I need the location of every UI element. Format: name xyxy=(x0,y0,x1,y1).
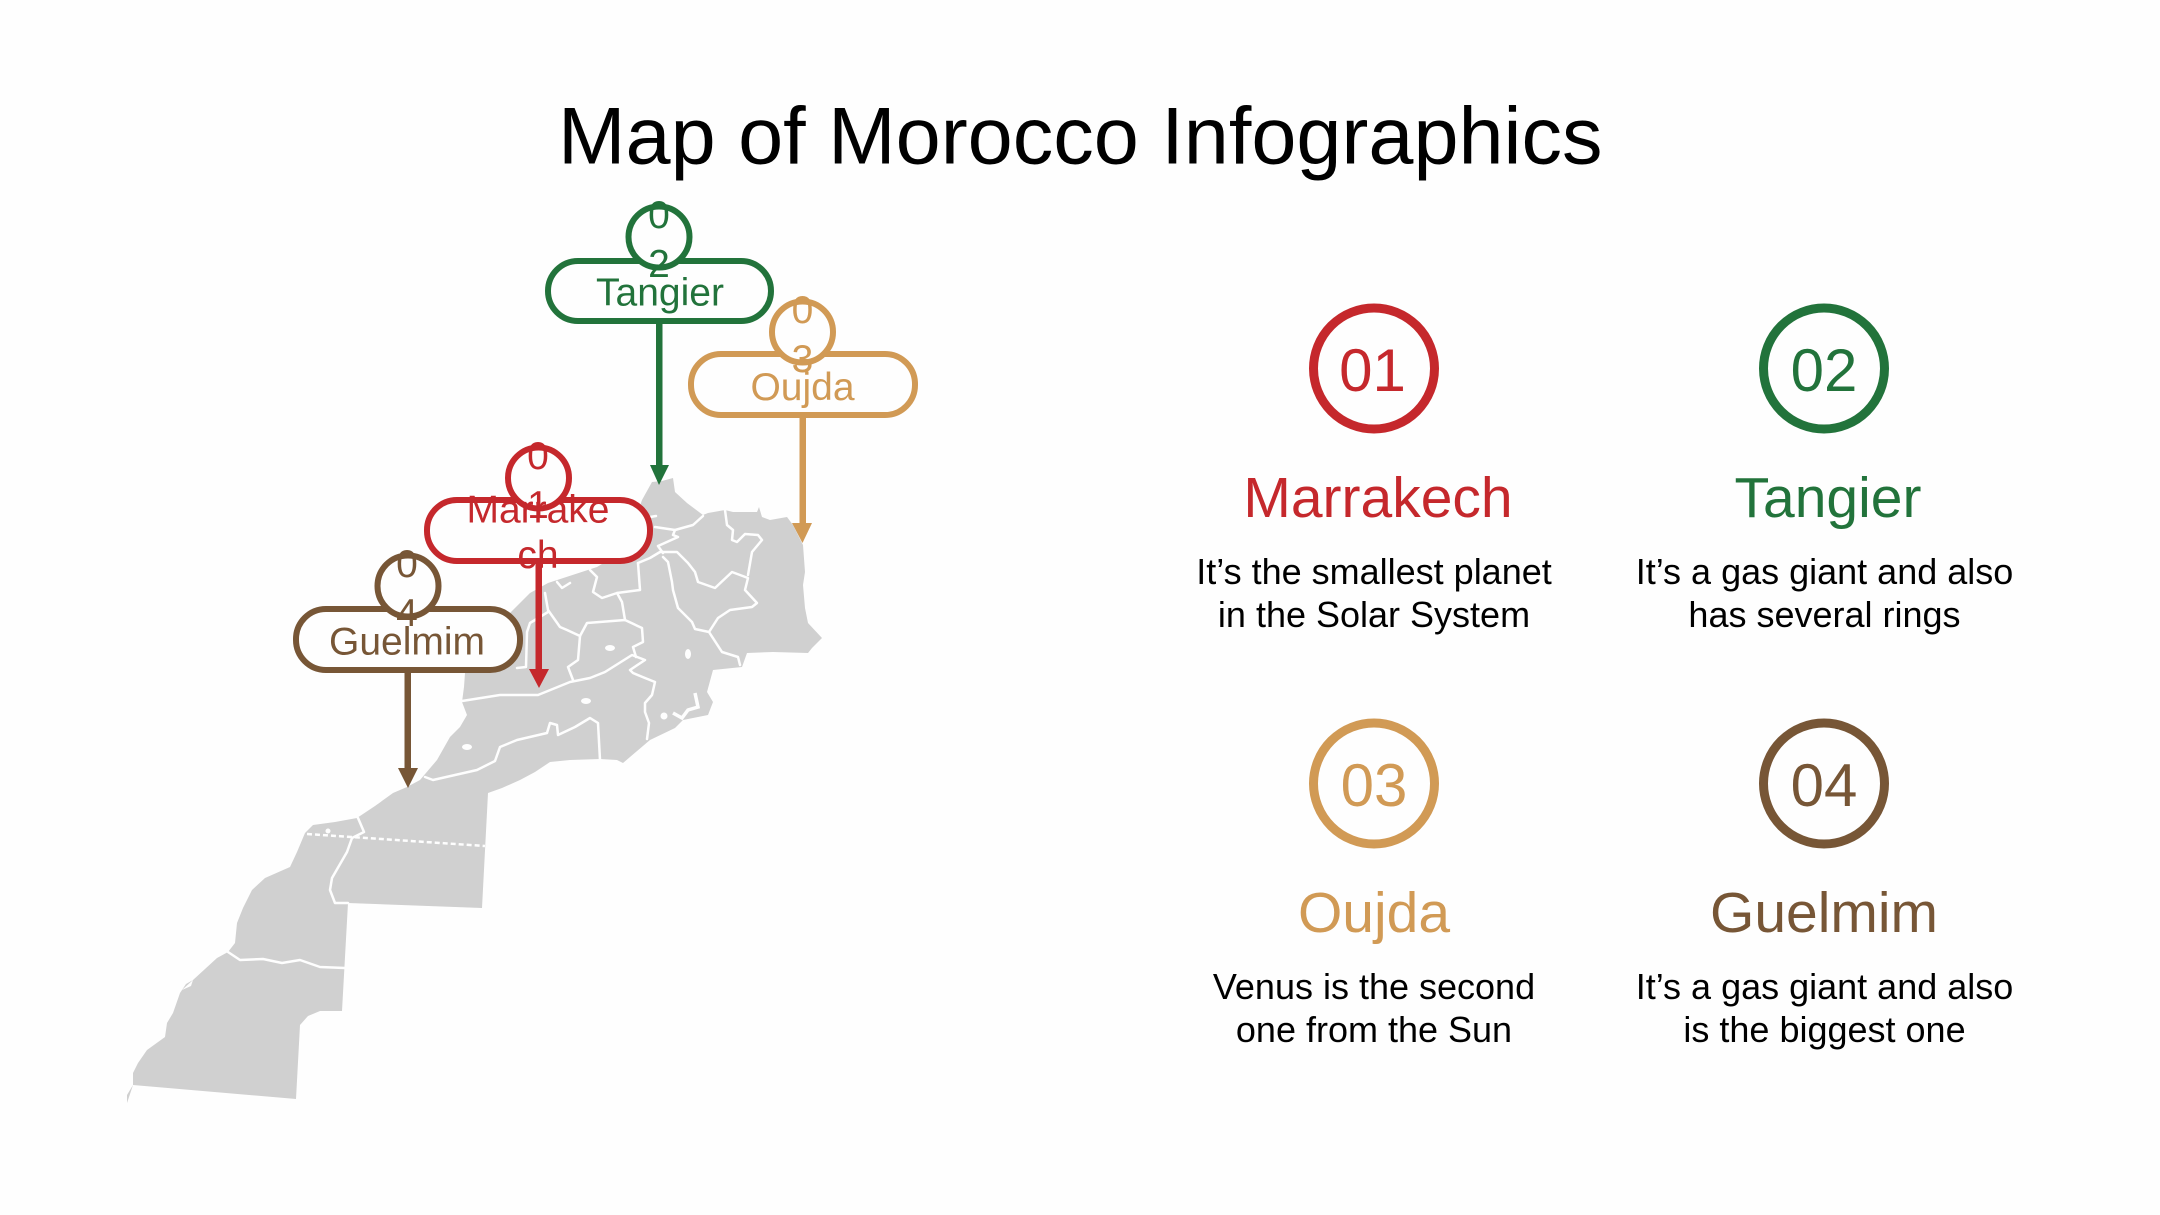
pin: Tangier xyxy=(548,206,771,321)
pin labels: Oujda: Oujda xyxy=(750,366,855,409)
panel: 03 Oujda: Venus is the second xyxy=(1213,966,1535,1007)
arrow: Marrakech xyxy=(529,562,549,688)
pin labels: Marrakech xyxy=(466,435,610,577)
panel: 02 Tangier: Tangier xyxy=(1735,466,1921,530)
pin: Oujda xyxy=(691,302,915,415)
arrow: Tangier xyxy=(650,322,669,485)
panel: 01 Marrakech: in the Solar System xyxy=(1218,594,1530,635)
panel: 02 Tangier: has several rings xyxy=(1688,594,1961,635)
panel: 02 Tangier xyxy=(1636,308,2013,635)
pin labels: Tangier xyxy=(596,194,724,314)
panel: 04 Guelmim: It’s a gas giant and also xyxy=(1636,966,2013,1007)
panel: 01 Marrakech: Marrakech xyxy=(1243,466,1513,530)
panel: 03 Oujda: Oujda xyxy=(1298,881,1450,945)
pin labels: Oujda: 0 xyxy=(792,289,813,332)
panel: 02 Tangier: 02 xyxy=(1791,337,1857,404)
map of Morocco xyxy=(127,478,822,1103)
pin labels: Marrakech: 1 xyxy=(527,484,549,527)
panel: 03 Oujda: 03 xyxy=(1341,752,1407,819)
pin labels: Tangier: Tangier xyxy=(596,272,724,314)
panel: 01 Marrakech: It’s the smallest planet xyxy=(1196,551,1552,592)
arrow: Guelmim xyxy=(398,671,418,788)
panel: 01 Marrakech xyxy=(1196,308,1552,635)
panel: 04 Guelmim: 04 xyxy=(1791,752,1857,819)
arrow: Oujda xyxy=(792,416,812,543)
pin labels: Guelmim xyxy=(329,543,485,664)
pin labels: Tangier: 0 xyxy=(648,194,670,237)
pin: Marrakech xyxy=(427,448,650,561)
pin labels: Guelmim: 4 xyxy=(396,592,418,635)
pin labels: Tangier: 2 xyxy=(648,243,670,286)
title: Map of Morocco Infographics xyxy=(558,92,1603,182)
pin: Guelmim xyxy=(296,556,520,670)
panel: 01 Marrakech: 01 xyxy=(1339,337,1406,404)
pin labels: Marrakech: Marrake xyxy=(466,488,610,532)
pin labels: Marrakech: ch xyxy=(517,534,559,577)
panel: 04 Guelmim: is the biggest one xyxy=(1683,1009,1966,1050)
pin labels: Oujda: 3 xyxy=(792,338,813,381)
pin labels: Guelmim: Guelmim xyxy=(329,620,485,664)
pin labels: Guelmim: 0 xyxy=(396,543,418,586)
panel: 04 Guelmim xyxy=(1636,723,2013,1050)
pin labels: Marrakech: 0 xyxy=(527,435,549,478)
panel: 04 Guelmim: Guelmim xyxy=(1710,881,1938,945)
pin labels: Oujda xyxy=(750,289,855,409)
panel: 03 Oujda xyxy=(1213,723,1535,1050)
panel: 02 Tangier: It’s a gas giant and also xyxy=(1636,551,2013,592)
panel: 03 Oujda: one from the Sun xyxy=(1236,1009,1512,1050)
